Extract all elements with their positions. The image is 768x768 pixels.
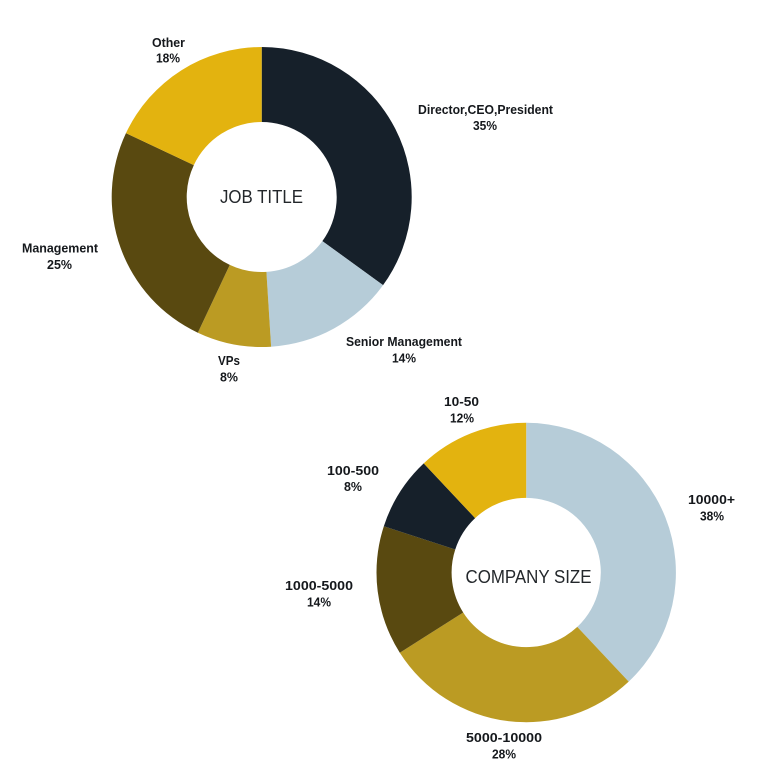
label: 100-500 8%: 100-500 xyxy=(327,464,379,478)
label: Senior Management 14% xyxy=(346,335,463,366)
label: 5000-10000 28%: 5000-10000 xyxy=(466,731,542,745)
label: VPs 8%: VPs xyxy=(218,354,240,368)
label: 100-500 8%: 8% xyxy=(344,480,362,494)
label: 100-500 8% xyxy=(327,464,379,494)
label: 1000-5000 14%: 14% xyxy=(307,596,331,610)
segment: VPs 8% xyxy=(198,265,271,347)
label: 10000+ 38% xyxy=(688,493,735,524)
label: Director, CEO, President 35%: Director,CEO,President xyxy=(418,103,554,117)
label: Management 25%: Management xyxy=(22,242,99,256)
segment: 5000-10000 28% xyxy=(400,612,629,722)
segment: 1000-5000 14% xyxy=(377,526,463,653)
segment: 10-50 12% xyxy=(424,423,526,518)
label: Other 18% xyxy=(152,36,185,66)
segment: 100-500 8% xyxy=(384,463,475,549)
label: 10-50 12%: 12% xyxy=(450,412,474,426)
segment: Senior Management 14% xyxy=(266,241,383,347)
label: 10-50 12%: 10-50 xyxy=(444,395,479,409)
label: Senior Management 14%: Senior Management xyxy=(346,335,463,349)
label: 1000-5000 14%: 1000-5000 xyxy=(285,579,353,593)
label: Management 25% xyxy=(22,242,99,272)
label: 10-50 12% xyxy=(444,395,479,426)
label: 1000-5000 14% xyxy=(285,579,353,610)
donut chart: job title xyxy=(112,47,412,347)
label: Senior Management 14%: 14% xyxy=(392,352,416,366)
label: Other 18%: 18% xyxy=(156,52,180,66)
label: Other 18%: Other xyxy=(152,36,185,50)
segment: Other 18% xyxy=(126,47,262,165)
center label: company size: COMPANY SIZE xyxy=(466,567,592,587)
segment: Director, CEO, President 35% xyxy=(262,47,412,285)
label: 5000-10000 28% xyxy=(466,731,542,762)
segment: Management 25% xyxy=(112,133,230,333)
label: Management 25%: 25% xyxy=(47,258,72,272)
label: 5000-10000 28%: 28% xyxy=(492,748,516,762)
center label: job title: JOB TITLE xyxy=(220,187,303,207)
label: VPs 8%: 8% xyxy=(220,370,238,384)
donut chart: company size xyxy=(377,423,676,722)
segment: 10000+ 38% xyxy=(526,423,676,682)
label: Director, CEO, President 35% xyxy=(418,103,554,133)
label: 10000+ 38%: 38% xyxy=(700,510,724,524)
label: 10000+ 38%: 10000+ xyxy=(688,493,735,507)
label: VPs 8% xyxy=(218,354,240,384)
label: Director, CEO, President 35%: 35% xyxy=(473,119,497,133)
